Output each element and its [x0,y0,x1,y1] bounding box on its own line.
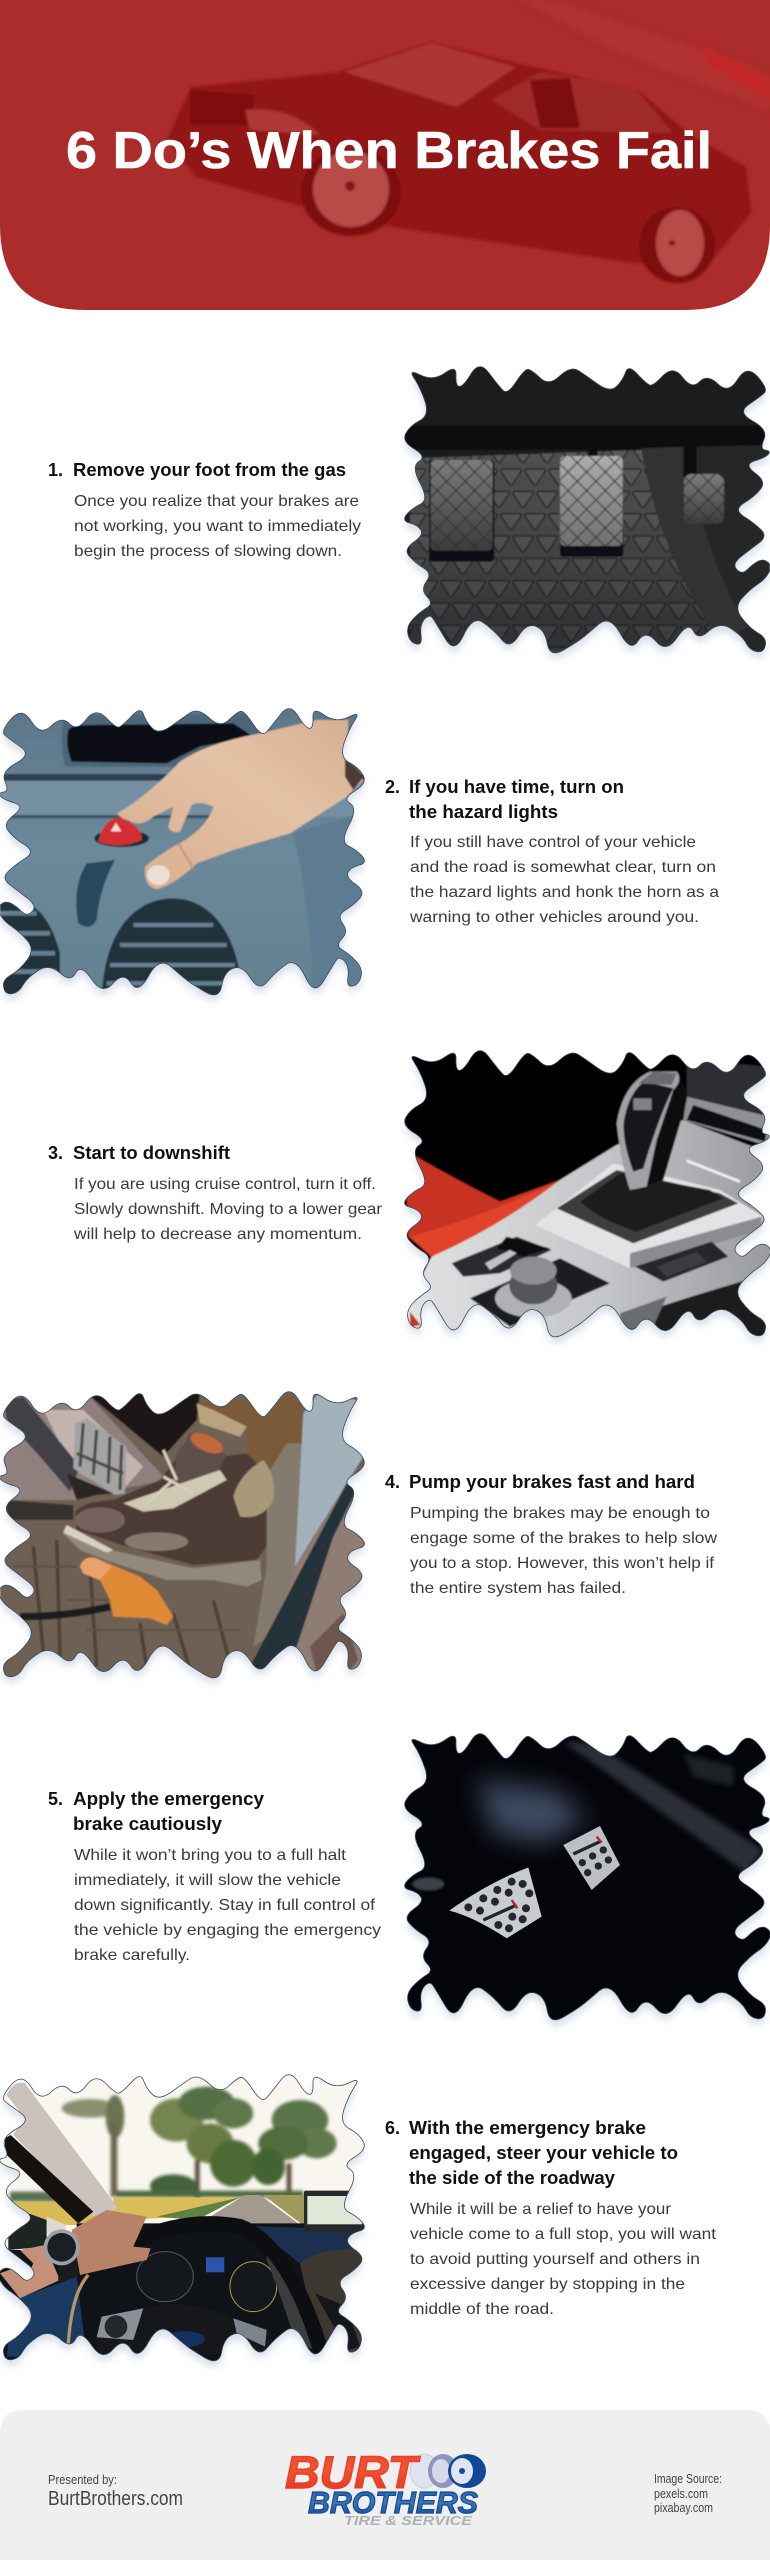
step 5 text: brake cautiously [73,1814,222,1834]
step 4 text: engage some of the brakes to help slow [410,1530,717,1547]
step 2 text: 2. [385,777,400,797]
logo: Burt Brothers Tire & Service: BURT [285,2447,421,2498]
step 2 text: the hazard lights [409,802,558,822]
title: 6 Do’s When Brakes Fail [66,122,712,180]
step 1 text: Once you realize that your brakes are [74,493,359,510]
step 3 text: will help to decrease any momentum. [73,1226,362,1243]
presented by credit [48,2472,183,2510]
step 6 text [385,2118,717,2318]
step 2 text: and the road is somewhat clear, turn on [410,859,716,876]
logo: Burt Brothers Tire & Service [285,2447,486,2528]
hero banner [0,0,770,310]
step 1 text: begin the process of slowing down. [74,543,342,560]
footer panel [0,2410,770,2560]
step 2 text: warning to other vehicles around you. [409,909,699,926]
photo 1: pedals [400,360,770,660]
photo 2: hazard button [0,700,370,1001]
step 6 text: 6. [385,2118,400,2138]
step 6 text: engaged, steer your vehicle to [409,2143,678,2163]
step 4 text [385,1472,717,1597]
step 6 text: to avoid putting yourself and others in [410,2251,700,2268]
step 4 text: Pumping the brakes may be enough to [410,1505,710,1522]
step 2 text: If you have time, turn on [409,777,624,797]
step 2 text: the hazard lights and honk the horn as a [410,884,719,901]
step 3 text: 3. [48,1143,63,1163]
step 1 text: not working, you want to immediately [74,518,361,535]
step 1 text: Remove your foot from the gas [73,460,346,480]
photo 4: boot on pedal [0,1380,370,1684]
step 3 text: If you are using cruise control, turn it off. [74,1176,376,1193]
logo: Burt Brothers Tire & Service: BROTHERS [308,2485,478,2520]
photo 6: driver view [0,2060,370,2370]
step 5 text: While it won’t bring you to a full halt [74,1847,347,1864]
step 5 text: brake carefully. [74,1947,190,1964]
photo 3: gear shifter [400,1040,770,1343]
logo: Burt Brothers Tire & Service: TIRE & SERVICE [344,2514,473,2528]
step 3 text [48,1143,383,1243]
step 6 text: excessive danger by stopping in the [410,2276,685,2293]
step 6 text: the side of the roadway [409,2168,615,2188]
photo 5: sport pedals [402,1733,770,2028]
step 6 text: While it will be a relief to have your [410,2201,672,2218]
image source credit: Image Source: [654,2471,722,2486]
step 5 text: the vehicle by engaging the emergency [74,1922,381,1939]
image source credit: pixabay.com [654,2500,713,2515]
image source credit: pexels.com [654,2486,708,2501]
presented by credit: Presented by: [48,2472,117,2487]
step 4 text: Pump your brakes fast and hard [409,1472,695,1492]
step 6 text: vehicle come to a full stop, you will want [410,2226,717,2243]
step 3 text: Slowly downshift. Moving to a lower gear [74,1201,383,1218]
presented by credit: BurtBrothers.com [48,2488,183,2510]
step 4 text: the entire system has failed. [410,1580,626,1597]
step 1 text [48,460,361,560]
step 5 text: immediately, it will slow the vehicle [74,1872,341,1889]
step 5 text [48,1789,381,1964]
step 4 text: 4. [385,1472,400,1492]
step 5 text: 5. [48,1789,63,1809]
step 5 text: Apply the emergency [73,1789,264,1809]
step 5 text: down significantly. Stay in full control of [74,1897,376,1914]
step 4 text: you to a stop. However, this won’t help if [410,1555,715,1572]
step 2 text [385,777,719,926]
image source credit [654,2471,722,2515]
step 3 text: Start to downshift [73,1143,230,1163]
step 2 text: If you still have control of your vehicle [410,834,696,851]
step 1 text: 1. [48,460,63,480]
step 6 text: middle of the road. [410,2301,554,2318]
step 6 text: With the emergency brake [409,2118,646,2138]
